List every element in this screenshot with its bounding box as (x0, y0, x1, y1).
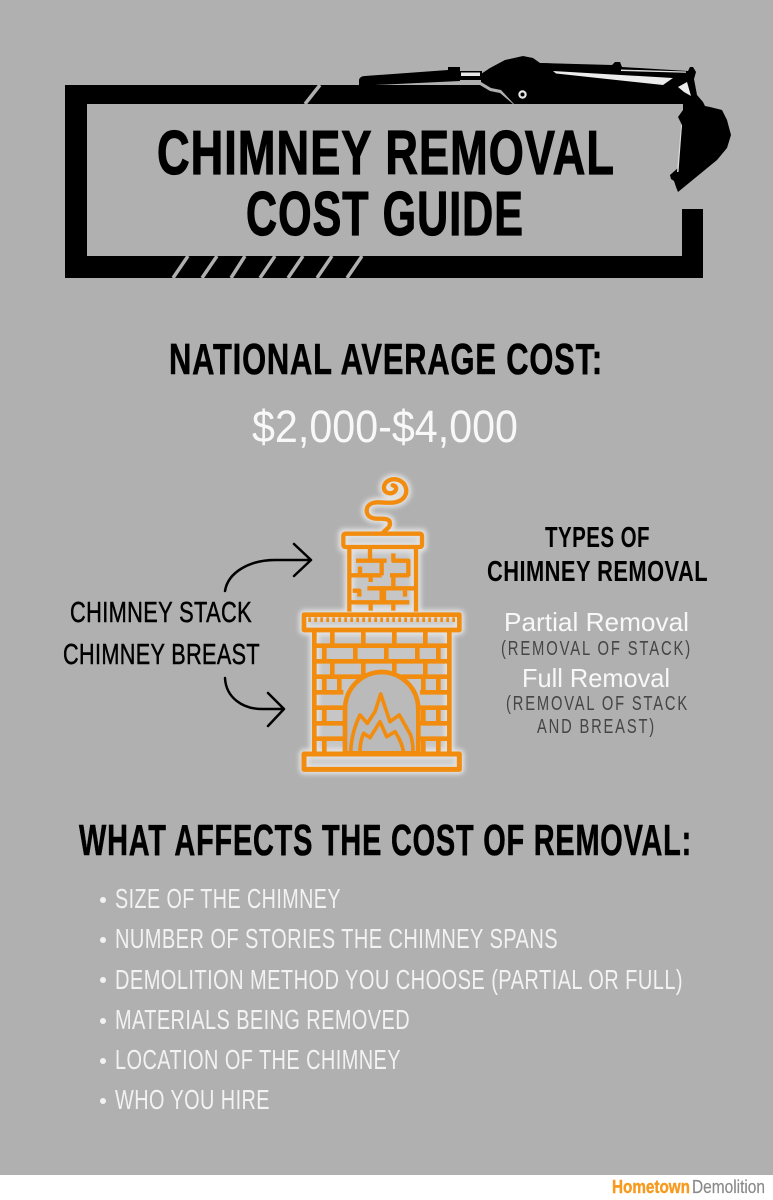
heading: types of removal (487, 522, 708, 588)
footer (0, 1175, 773, 1200)
price range: $2,000-$4,000 (252, 401, 518, 452)
footer logo: Hometown (612, 1177, 690, 1197)
full removal: Full Removal (522, 663, 670, 693)
flame (351, 694, 413, 752)
list of cost factors: WHO YOU HIRE (115, 1084, 270, 1115)
list of cost factors: NUMBER OF STORIES THE CHIMNEY SPANS (115, 923, 558, 954)
partial removal: (REMOVAL OF STACK) (501, 638, 692, 660)
banner frame (65, 85, 703, 278)
list of cost factors: LOCATION OF THE CHIMNEY (115, 1044, 401, 1075)
fireplace brick body (314, 631, 449, 753)
smoke curl (367, 479, 406, 532)
list of cost factors: MATERIALS BEING REMOVED (115, 1004, 410, 1035)
left labels (63, 597, 260, 671)
title banner frame with excavator (65, 56, 731, 278)
partial removal (501, 607, 692, 660)
arrow: to chimney stack (225, 544, 311, 591)
title: CHIMNEY REMOVAL (157, 119, 615, 188)
hearth base (304, 754, 459, 769)
icon: excavator arm (359, 56, 731, 192)
partial removal: Partial Removal (504, 607, 689, 637)
heading: national average cost: NATIONAL AVERAGE COST: (169, 335, 603, 384)
mantel (304, 615, 459, 630)
title: COST GUIDE (246, 180, 524, 249)
arrow: to chimney breast (225, 678, 284, 726)
list of cost factors: SIZE OF THE CHIMNEY (115, 883, 341, 914)
list of cost factors (100, 883, 683, 1115)
title (157, 119, 615, 249)
full removal: AND BREAST) (537, 716, 656, 738)
heading: types of removal: TYPES OF (545, 522, 650, 554)
left labels: CHIMNEY STACK (70, 597, 252, 629)
panel: types of chimney removal (487, 522, 708, 738)
footer logo (612, 1177, 765, 1197)
hearth opening (345, 672, 418, 753)
icon: fireplace and chimney (304, 479, 459, 769)
full removal (506, 663, 689, 738)
left labels: CHIMNEY BREAST (63, 639, 260, 671)
full removal: (REMOVAL OF STACK (506, 693, 689, 715)
heading: types of removal: CHIMNEY REMOVAL (487, 556, 708, 588)
chimney stack (343, 534, 422, 612)
